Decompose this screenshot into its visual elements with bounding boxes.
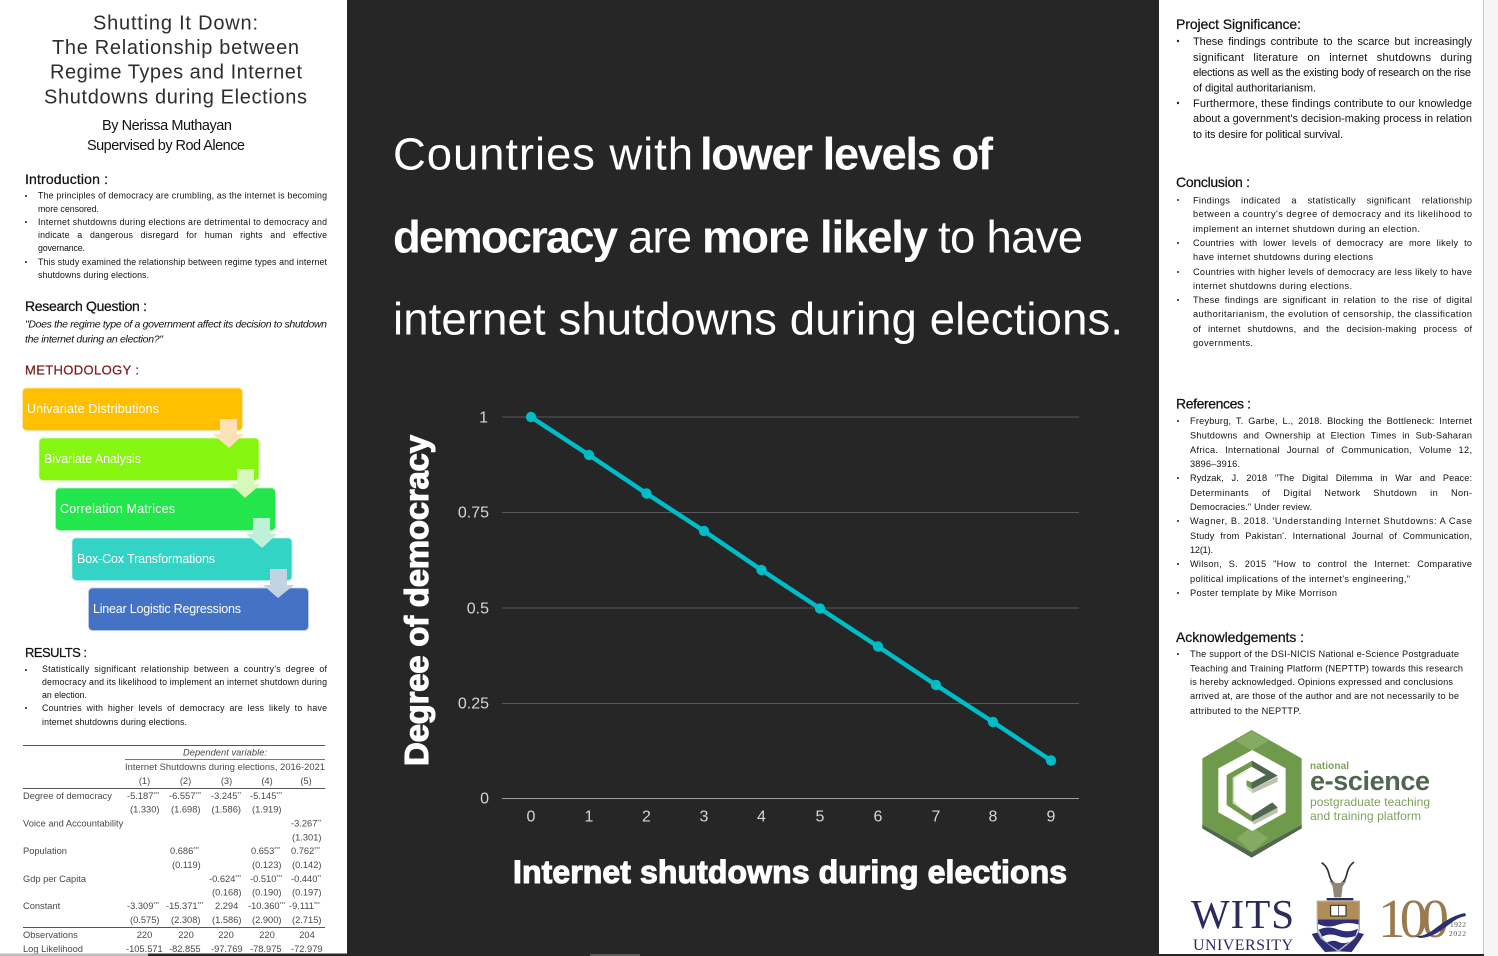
heading: introduction: Introduction : — [25, 171, 108, 187]
text block: conclusion: authoritarianism, the evolution of censorship, the classification — [1193, 309, 1472, 319]
step: bivariate analysis — [39, 438, 259, 480]
heading: project significance: Project Significance: — [1176, 16, 1301, 32]
step: univariate distributions — [22, 388, 242, 430]
regression table: (3) — [221, 776, 232, 786]
regression table: Log Likelihood — [23, 944, 83, 954]
regression table: -5.187 — [127, 791, 153, 801]
regression table — [23, 746, 325, 954]
text block: references: Africa. International Journal of Communication, Volume 12, — [1190, 445, 1472, 455]
text block: project significance: about a government's decision-making process in relation — [1193, 113, 1472, 125]
logo: 100 years: 1922 — [1450, 920, 1466, 929]
text block: results bullets: an election. — [42, 690, 87, 700]
x axis labels: 3 — [700, 808, 709, 826]
regression table: -15.371 — [166, 901, 198, 911]
text block: introduction bullets: indicate a dangerous disregard for human rights and effective — [38, 230, 327, 240]
headline: are — [628, 212, 692, 262]
text block: acknowledgements: arrived at, are those of the author and are not necessarily to be — [1190, 691, 1459, 701]
y axis labels: 0.5 — [467, 600, 489, 618]
text block: project significance: Furthermore, these findings contribute to our knowledge — [1193, 98, 1472, 110]
regression table: (1.301) — [292, 832, 321, 842]
regression table: Internet Shutdowns during elections, 2016-2021 — [125, 762, 325, 772]
text block: project significance: of digital authoritarianism. — [1193, 82, 1316, 94]
logo: national e-science: e-science — [1310, 766, 1430, 796]
regression table: *** — [276, 875, 282, 881]
x axis title: Internet shutdowns during elections — [513, 854, 1067, 890]
regression table: (1.330) — [130, 804, 159, 814]
panel: right column — [1159, 0, 1484, 956]
regression table: Population — [23, 846, 67, 856]
logo: wits university — [1191, 862, 1466, 954]
regression table: (4) — [261, 776, 273, 786]
headline: to have — [938, 212, 1083, 262]
text block: research question: the internet during an election?" — [25, 334, 164, 346]
logo: 100 years: 100 — [1378, 888, 1449, 949]
regression table: *** — [280, 902, 285, 908]
regression table: Observations — [23, 930, 78, 940]
regression table: (0.575) — [130, 915, 159, 925]
text block: references: Wagner, B. 2018. 'Understanding Internet Shutdowns: A Case — [1190, 516, 1472, 526]
text block: research question: "Does the regime type of a government affect its decision to shutdown — [25, 318, 327, 330]
regression table: -0.440 — [291, 874, 317, 884]
regression table: *** — [195, 792, 201, 798]
text block: project significance: significant literature on internet shutdowns during — [1193, 52, 1472, 64]
regression table: (0.123) — [252, 860, 281, 870]
text block: conclusion: Countries with higher levels of democracy are less likely to have — [1193, 267, 1472, 277]
data line — [526, 412, 1056, 766]
text block: references: Freyburg, T. Garbe, L., 2018. Blocking the Bottleneck: Internet — [1190, 416, 1472, 426]
regression table: -0.624 — [209, 874, 235, 884]
text block: results bullets: internet shutdowns during elections. — [42, 717, 187, 727]
headline — [393, 128, 1123, 344]
regression table: -10.360 — [248, 901, 280, 911]
text block: conclusion: of internet shutdowns, and the decision-making process of — [1193, 324, 1472, 334]
y axis labels: 1 — [479, 410, 488, 426]
logo: national e-science — [1202, 730, 1430, 858]
title: The Relationship between — [52, 37, 299, 59]
text block: results bullets: Countries with higher levels of democracy are less likely to have — [42, 703, 327, 713]
line chart — [398, 410, 1079, 890]
title: Shutting It Down: — [93, 12, 258, 34]
text block: introduction bullets: shutdowns during elections. — [38, 270, 149, 280]
text block: acknowledgements: attributed to the NEPTTP. — [1190, 706, 1301, 716]
text block: acknowledgements: is hereby acknowledged. Opinions expressed and conclusions — [1190, 677, 1453, 687]
text block: conclusion: Countries with lower levels of democracy are more likely to — [1193, 238, 1472, 248]
text block: introduction bullets — [25, 190, 328, 280]
logo: 100 years: 2022 — [1449, 929, 1466, 938]
text block: references: Study from Pakistan'. International Journal of Communication, — [1190, 531, 1472, 541]
text block: results bullets: Statistically significant relationship between a country's degree of — [42, 664, 328, 674]
y axis labels: 0.75 — [458, 504, 489, 522]
heading: methodology: METHODOLOGY : — [25, 362, 139, 378]
y axis title: Degree of democracy — [398, 434, 435, 766]
arrow: step 3 to 4 — [246, 518, 277, 548]
x axis labels: 7 — [932, 808, 941, 826]
headline: more likely — [702, 212, 929, 262]
text block: introduction bullets: This study examined the relationship between regime types and internet — [38, 257, 328, 267]
text block: references: Wilson, S. 2015 "How to control the Internet: Comparative — [1190, 559, 1472, 569]
authors: By Nerissa Muthayan — [102, 118, 232, 134]
regression table: ** — [317, 820, 321, 826]
regression table: *** — [314, 847, 320, 853]
text block: references: 3896–3916. — [1190, 459, 1240, 469]
x axis labels: 9 — [1047, 808, 1056, 826]
regression table: *** — [198, 902, 203, 908]
regression table: (0.168) — [212, 888, 241, 898]
regression table: -97.769 — [211, 944, 243, 954]
step: correlation matrices — [56, 488, 276, 530]
regression table: 220 — [178, 930, 194, 940]
regression table: -3.245 — [211, 791, 237, 801]
text block: acknowledgements: The support of the DSI-NICIS National e-Science Postgraduate — [1190, 649, 1459, 659]
x axis labels: 0 — [527, 808, 536, 826]
text block: conclusion: between a country's degree of democracy and its likelihood to — [1193, 209, 1472, 219]
text block: research question — [25, 318, 327, 346]
text block: references: Democracies." Under review. — [1190, 502, 1312, 512]
text block: project significance: These findings contribute to the scarce but increasingly — [1193, 36, 1472, 48]
x axis labels: 4 — [757, 808, 766, 826]
logo: national e-science: national — [1310, 761, 1349, 772]
logo: national e-science: and training platform — [1310, 809, 1421, 823]
regression table: 220 — [137, 930, 152, 940]
x axis labels: 8 — [989, 808, 998, 826]
step: box-cox transformations — [72, 538, 292, 580]
headline: Countries with — [393, 128, 693, 180]
text block: conclusion: governments. — [1193, 338, 1253, 348]
authors — [87, 118, 245, 154]
text block: introduction bullets: The principles of democracy are crumbling, as the internet is becoming — [38, 190, 327, 200]
headline: democracy — [393, 212, 619, 262]
panel: centre dark panel — [347, 0, 1159, 956]
heading: references: References : — [1176, 396, 1251, 412]
text block: introduction bullets: more censored. — [38, 204, 99, 214]
title: Regime Types and Internet — [50, 62, 302, 84]
text block: references: Rydzak, J. 2018 "The Digital Dilemma in War and Peace: — [1190, 473, 1472, 483]
regression table: (0.190) — [252, 888, 281, 898]
text block: references: Determinants of Digital Network Shutdown in Non- — [1190, 488, 1472, 498]
regression table: -105.571 — [126, 944, 163, 954]
step: box-cox transformations: Box-Cox Transformations — [77, 552, 215, 566]
text block: conclusion: These findings are significant in relation to the rise of digital — [1193, 295, 1472, 305]
arrow: step 4 to 5 — [263, 569, 294, 598]
regression table: *** — [153, 902, 159, 908]
regression table: (1.698) — [171, 804, 200, 814]
regression table: 2.294 — [215, 901, 238, 911]
headline: lower levels of — [700, 128, 994, 180]
regression table: 0.686 — [170, 846, 193, 856]
text block: introduction bullets: Internet shutdowns during elections are detrimental to democracy and — [38, 217, 327, 227]
heading: results: RESULTS : — [25, 645, 87, 660]
title — [44, 12, 307, 108]
regression table: 220 — [259, 930, 275, 940]
regression table: (1.586) — [212, 804, 241, 814]
regression table: (0.142) — [292, 860, 321, 870]
regression table: 220 — [218, 930, 234, 940]
regression table: Dependent variable: — [183, 748, 267, 758]
logo: wits university: WITS — [1191, 891, 1294, 937]
step: linear logistic regressions — [88, 588, 308, 630]
regression table: 0.653 — [251, 846, 274, 856]
text block: conclusion: Findings indicated a statistically significant relationship — [1193, 196, 1472, 206]
text block: conclusion: have internet shutdowns during elections — [1193, 252, 1373, 262]
arrow: step 1 to 2 — [213, 419, 244, 448]
flow diagram: methodology steps — [22, 388, 308, 630]
regression table: *** — [193, 847, 199, 853]
heading: conclusion: Conclusion : — [1176, 174, 1250, 190]
text block: references: Shutdowns and Ownership at Election Times in Sub-Saharan — [1190, 430, 1472, 440]
regression table: -5.145 — [250, 791, 276, 801]
regression table: Gdp per Capita — [23, 874, 87, 884]
regression table: (0.197) — [292, 888, 321, 898]
arrow: step 2 to 3 — [230, 469, 261, 498]
regression table: (2.900) — [252, 915, 281, 925]
authors: Supervised by Rod Alence — [87, 138, 245, 154]
icon: wits crest — [1312, 862, 1364, 952]
regression table: -3.309 — [127, 901, 153, 911]
x axis labels: 1 — [585, 808, 594, 826]
step: correlation matrices: Correlation Matrices — [60, 502, 175, 516]
regression table: -72.979 — [291, 944, 323, 954]
regression table: 0.762 — [291, 846, 314, 856]
step: univariate distributions: Univariate Distributions — [27, 402, 159, 416]
regression table: -3.267 — [291, 818, 317, 828]
regression table: (2.308) — [171, 915, 200, 925]
text block: project significance — [1177, 36, 1472, 141]
text block: references: Poster template by Mike Morrison — [1190, 588, 1337, 598]
regression table: (2) — [180, 776, 191, 786]
regression table: *** — [274, 847, 280, 853]
heading: acknowledgements: Acknowledgements : — [1176, 629, 1304, 645]
regression table: (2.715) — [292, 915, 321, 925]
regression table: ** — [317, 875, 321, 881]
y axis labels: 0 — [480, 790, 489, 808]
regression table: 204 — [299, 930, 315, 940]
regression table: *** — [235, 875, 241, 881]
regression table: -9.111 — [289, 901, 314, 911]
regression table: -0.510 — [250, 874, 276, 884]
text block: results bullets: democracy and its likelihood to implement an internet shutdown during — [42, 677, 327, 687]
heading: research question: Research Question : — [25, 298, 147, 314]
text block: conclusion: implement an internet shutdown during an election. — [1193, 224, 1420, 234]
y axis labels — [458, 410, 489, 808]
text block: results bullets — [25, 664, 328, 727]
text block: references: political implications of the internet's engineering," — [1190, 574, 1410, 584]
regression table: Degree of democracy — [23, 791, 112, 801]
title: Shutdowns during Elections — [44, 86, 307, 108]
x axis labels: 2 — [642, 808, 651, 826]
regression table: (5) — [300, 776, 312, 786]
regression table: *** — [153, 792, 159, 798]
panel: left column — [0, 0, 347, 956]
text block: acknowledgements: Teaching and Training Platform (NEPTTP) towards this research — [1190, 664, 1463, 674]
text block: acknowledgements — [1177, 649, 1463, 716]
step: linear logistic regressions: Linear Logistic Regressions — [93, 602, 241, 616]
text block: project significance: to its desire for political survival. — [1193, 129, 1343, 141]
regression table: (1.586) — [212, 915, 241, 925]
text block: references — [1177, 416, 1472, 598]
regression table: -82.855 — [169, 944, 201, 954]
logo: wits university: UNIVERSITY — [1193, 937, 1293, 954]
text block: references: 12(1). — [1190, 545, 1213, 555]
regression table: (0.119) — [172, 860, 201, 870]
icon: e-science hexagon — [1202, 730, 1302, 858]
regression table: Voice and Accountability — [23, 818, 124, 828]
regression table: -78.975 — [250, 944, 282, 954]
x axis labels — [527, 808, 1056, 826]
text block: project significance: elections as well as the existing body of research on the rise — [1193, 67, 1471, 79]
y axis labels: 0.25 — [458, 696, 489, 712]
regression table: Constant — [23, 901, 61, 911]
text block: introduction bullets: governance. — [38, 243, 85, 253]
regression table: (1.919) — [252, 804, 281, 814]
logo: national e-science: postgraduate teaching — [1310, 795, 1430, 809]
step: bivariate analysis: Bivariate Analysis — [44, 452, 141, 466]
x axis labels: 5 — [816, 808, 825, 826]
headline: internet shutdowns during elections. — [393, 294, 1123, 344]
text block: conclusion: internet shutdowns during elections. — [1193, 281, 1352, 291]
x axis labels: 6 — [874, 808, 883, 826]
regression table: (1) — [139, 776, 150, 786]
regression table: *** — [276, 792, 282, 798]
text block: conclusion — [1177, 196, 1472, 348]
regression table: -6.557 — [169, 791, 195, 801]
regression table: *** — [314, 902, 320, 908]
regression table: ** — [237, 792, 241, 798]
